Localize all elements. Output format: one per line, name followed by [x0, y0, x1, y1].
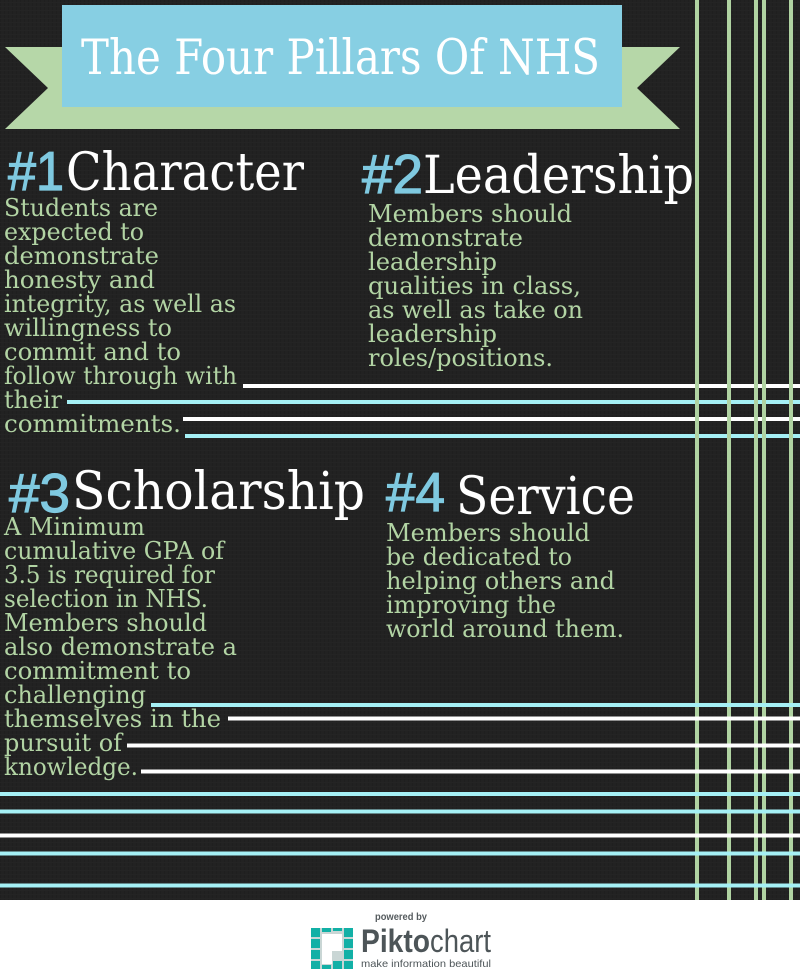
heading: service — [386, 461, 635, 527]
icon: piktochart logo — [311, 928, 353, 969]
text: scholarship: challenging — [4, 681, 146, 709]
vertical green lines — [695, 0, 793, 900]
lower horizontal lines — [0, 703, 800, 888]
text: character: follow through with — [4, 362, 237, 390]
text: character: their — [4, 386, 63, 414]
text: scholarship — [3, 513, 237, 781]
upper horizontal lines — [67, 384, 800, 438]
text: leadership: leadership — [368, 248, 497, 276]
text: service: be dedicated to — [386, 543, 572, 571]
text: character: honesty and — [4, 266, 155, 294]
heading: character: #1 — [8, 140, 64, 202]
heading: scholarship: #3 — [9, 462, 70, 524]
title plate — [62, 5, 622, 107]
text: scholarship: knowledge. — [4, 753, 138, 781]
text: leadership: qualities in class, — [368, 272, 581, 300]
text: service: improving the — [386, 591, 556, 619]
text: leadership: leadership — [368, 320, 497, 348]
panel: service — [386, 461, 635, 643]
piktochart wordmark: chart — [430, 923, 491, 959]
text: service: Members should — [386, 519, 590, 547]
text: service: helping others and — [386, 567, 615, 595]
heading: service: #4 — [386, 461, 445, 523]
panel: scholarship — [3, 462, 365, 781]
ribbon — [5, 47, 680, 129]
heading: leadership: #2 — [362, 143, 423, 205]
text: service — [386, 519, 624, 643]
text: scholarship: themselves in the — [4, 705, 221, 733]
text: scholarship: Members should — [4, 609, 207, 637]
panel: character — [4, 140, 304, 438]
text: scholarship: cumulative GPA of — [4, 537, 226, 565]
text: scholarship: pursuit of — [4, 729, 124, 757]
text: character — [4, 194, 237, 438]
title banner — [5, 5, 680, 129]
powered by label: powered by — [375, 912, 427, 923]
text: scholarship: also demonstrate a — [4, 633, 237, 661]
heading: service: Service — [456, 467, 635, 527]
text: character: willingness to — [4, 314, 172, 342]
piktochart wordmark: make information beautiful — [361, 958, 491, 970]
text: character: integrity, as well as — [4, 290, 236, 318]
text: leadership: as well as take on — [368, 296, 583, 324]
text: service: world around them. — [386, 615, 624, 643]
text: leadership: demonstrate — [368, 224, 523, 252]
text: character: commitments. — [4, 410, 181, 438]
heading: character: Character — [66, 143, 304, 203]
text: leadership: Members should — [368, 200, 572, 228]
text: leadership — [368, 200, 583, 372]
text: scholarship: commitment to — [4, 657, 191, 685]
piktochart wordmark — [361, 923, 491, 970]
text: leadership: roles/positions. — [368, 344, 553, 372]
text: character: commit and to — [4, 338, 181, 366]
text: scholarship: selection in NHS. — [4, 585, 208, 613]
text: character: expected to — [4, 218, 144, 246]
text: character: Students are — [4, 194, 158, 222]
heading: leadership: Leadership — [423, 146, 694, 206]
footer: powered by piktochart — [311, 912, 491, 970]
piktochart wordmark: Pikto — [361, 923, 430, 959]
title: The Four Pillars Of NHS — [81, 29, 600, 86]
text: scholarship: A Minimum — [3, 513, 145, 541]
text: scholarship: 3.5 is required for — [4, 561, 216, 589]
panel: leadership — [362, 143, 694, 372]
text: character: demonstrate — [4, 242, 159, 270]
heading: scholarship: Scholarship — [72, 462, 365, 522]
